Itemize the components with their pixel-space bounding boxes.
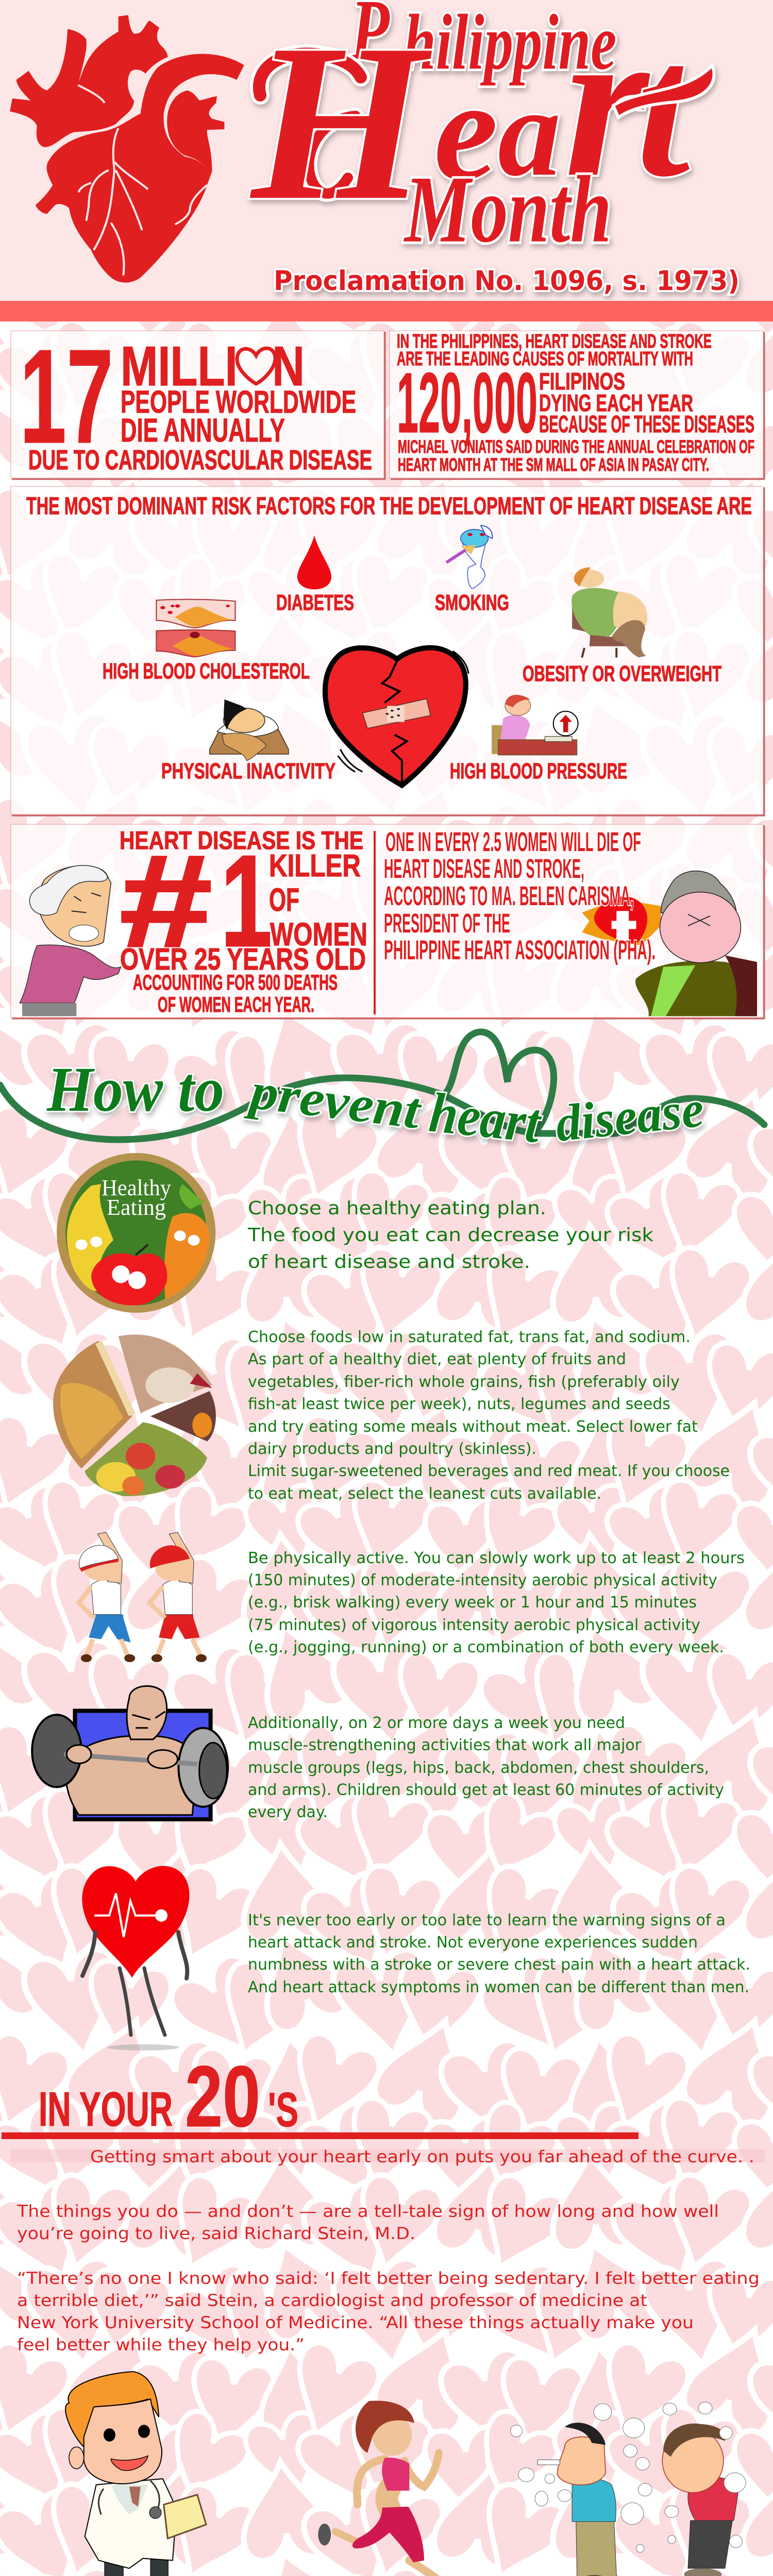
panel: risk factors bbox=[11, 486, 764, 816]
text block: choose foods: Limit sugar-sweetened beverages and red meat. If you choose bbox=[248, 1462, 730, 1480]
title flourishes behind Heart bbox=[259, 54, 361, 194]
text block: muscle strengthening: every day. bbox=[248, 1803, 328, 1821]
icon: heart character with pulse bbox=[82, 1866, 190, 2050]
stat: 17: 17 bbox=[20, 322, 113, 471]
heading part: disease: disease bbox=[553, 1080, 707, 1153]
icon: anatomical heart bbox=[10, 15, 244, 283]
text block: muscle strengthening: Additionally, on 2 or more days a week you need bbox=[248, 1714, 625, 1732]
title word: Heart: H bbox=[248, 0, 434, 247]
text block: warning signs: numbness with a stroke or severe chest pain with a heart attack. bbox=[248, 1956, 750, 1974]
icon: obese person in chair bbox=[572, 567, 647, 657]
label: high blood cholesterol: HIGH BLOOD CHOLESTEROL bbox=[103, 659, 310, 684]
text block: the things you do: you’re going to live, said Richard Stein, M.D. bbox=[17, 2224, 415, 2243]
text: dying each year: DYING EACH YEAR bbox=[539, 389, 693, 416]
stat: number one: 1 bbox=[221, 828, 272, 974]
text: due to cardiovascular disease: DUE TO CARDIOVASCULAR DISEASE bbox=[28, 445, 372, 476]
title word: Heart: t bbox=[636, 3, 697, 216]
text block: warning signs bbox=[248, 1911, 750, 1996]
divider bbox=[374, 831, 376, 1014]
stat word: million: MILLION bbox=[121, 335, 305, 398]
text block: warning signs: It's never too early or too late to learn the warning signs of a bbox=[248, 1911, 726, 1929]
text block: choose foods: dairy products and poultry (skinless). bbox=[248, 1440, 536, 1458]
label: smoking: SMOKING bbox=[435, 590, 509, 615]
panel: women and heart disease: PRESIDENT OF THE bbox=[384, 908, 510, 939]
text: over 25 years old: OVER 25 YEARS OLD bbox=[120, 942, 366, 976]
text block: choose foods: vegetables, fiber-rich whole grains, fish (preferably oily bbox=[248, 1373, 680, 1391]
text block: muscle strengthening: muscle groups (legs, hips, back, abdomen, chest shoulders, bbox=[248, 1759, 709, 1777]
text block: be physically active: (e.g., jogging, running) or a combination of both every week. bbox=[248, 1638, 724, 1656]
heading part: how to: How to bbox=[46, 1054, 224, 1125]
title word: Philippine: hilippine bbox=[404, 0, 616, 86]
proclamation line: Proclamation No. 1096, s. 1973) bbox=[274, 265, 740, 297]
text: people worldwide: PEOPLE WORLDWIDE bbox=[121, 384, 356, 419]
text: filipinos: FILIPINOS bbox=[539, 368, 625, 395]
text block: the things you do: The things you do — and don’t — are a tell-tale sign of how long and how well bbox=[16, 2201, 719, 2221]
text block: warning signs: heart attack and stroke. Not everyone experiences sudden bbox=[248, 1934, 698, 1952]
heading decoration: green swoosh with heart loop bbox=[0, 1032, 764, 1140]
text block: Stein quote: New York University School of Medicine. “All these things actually make you bbox=[17, 2313, 694, 2332]
text block: Stein quote: “There’s no one I know who said: ‘I felt better being sedentary. I felt better eating bbox=[17, 2268, 760, 2288]
text: die annually: DIE ANNUALLY bbox=[121, 412, 285, 449]
icon: blood drop bbox=[297, 535, 331, 589]
icon: exercising children bbox=[79, 1532, 207, 1662]
icon: broken heart with bandage bbox=[325, 648, 468, 785]
text block: muscle strengthening bbox=[248, 1714, 724, 1821]
heading: how to prevent heart disease bbox=[46, 1054, 707, 1155]
text block: be physically active: Be physically active. You can slowly work up to at least 2 hours bbox=[248, 1549, 745, 1567]
text block: healthy eating plan: Choose a healthy eating plan. bbox=[248, 1198, 546, 1219]
text block: the things you do bbox=[16, 2201, 719, 2243]
heading part: prevent: prevent bbox=[243, 1062, 425, 1140]
text block: muscle strengthening: muscle-strengthening activities that work all major bbox=[248, 1736, 642, 1754]
text block: be physically active bbox=[248, 1549, 745, 1656]
icon: heart letter O bbox=[237, 348, 275, 384]
stat: hash sign: # bbox=[120, 828, 212, 974]
panel: 120,000 Filipinos: 120,000 bbox=[397, 355, 537, 451]
text: getting smart: Getting smart about your heart early on puts you far ahead of the curve. . bbox=[90, 2147, 754, 2166]
icon: smoking figure bbox=[446, 526, 492, 588]
panel: women and heart disease bbox=[11, 824, 764, 1019]
illustration: elderly woman left bbox=[20, 866, 121, 1016]
heading part: heart: heart bbox=[426, 1081, 545, 1155]
icon: sleeping person at desk bbox=[210, 700, 289, 760]
icon: blood pressure check bbox=[492, 695, 578, 755]
text block: choose foods: As part of a healthy diet, eat plenty of fruits and bbox=[248, 1350, 626, 1368]
title word: Month: Month bbox=[403, 157, 612, 263]
heading: in your 20's bbox=[39, 2048, 298, 2145]
panel: 120,000 Filipinos bbox=[390, 331, 764, 479]
illustration: smoker and bystander bbox=[510, 2402, 746, 2576]
text block: healthy eating plan: of heart disease and stroke. bbox=[248, 1251, 530, 1273]
heading: in your 20's: 'S bbox=[268, 2082, 298, 2137]
text block: choose foods bbox=[248, 1328, 730, 1503]
icon: weightlifter bbox=[32, 1686, 228, 1819]
text block: be physically active: (75 minutes) of vigorous intensity aerobic physical activity bbox=[248, 1616, 700, 1634]
text block: choose foods: fish-at least twice per week), nuts, legumes and seeds bbox=[248, 1395, 670, 1413]
text block: choose foods: Choose foods low in saturated fat, trans fat, and sodium. bbox=[248, 1328, 691, 1346]
text block: Stein quote: feel better while they help you.” bbox=[17, 2335, 305, 2354]
text: of: OF bbox=[269, 882, 299, 918]
icon: healthy eating badge bbox=[57, 1153, 215, 1313]
text: women: WOMEN bbox=[270, 917, 367, 953]
heading: in your 20's: IN YOUR bbox=[39, 2082, 173, 2136]
title word: Heart: a bbox=[498, 62, 561, 202]
text block: choose foods: and try eating some meals without meat. Select lower fat bbox=[248, 1418, 698, 1436]
title word: Heart: e bbox=[434, 50, 498, 210]
text block: be physically active: (150 minutes) of moderate-intensity aerobic physical activity bbox=[248, 1571, 717, 1589]
badge text: Healthy bbox=[102, 1175, 171, 1200]
heading underline bbox=[2, 2132, 638, 2139]
text block: healthy eating plan bbox=[247, 1198, 653, 1273]
text block: warning signs: And heart attack symptoms in women can be different than men. bbox=[248, 1978, 749, 1996]
title: Philippine Heart Month bbox=[248, 0, 714, 263]
text: accounting for 500 deaths: ACCOUNTING FOR 500 DEATHS bbox=[133, 970, 338, 994]
icon: clogged arteries bbox=[156, 599, 235, 657]
icon: food groups plate bbox=[53, 1334, 216, 1496]
label: diabetes: DIABETES bbox=[276, 590, 354, 615]
illustration: jogger bbox=[318, 2401, 456, 2576]
panel: 17 million bbox=[11, 322, 385, 479]
text: killer: KILLER bbox=[269, 848, 361, 883]
text block: Stein quote bbox=[17, 2268, 760, 2354]
title flourish: t crossbar bbox=[613, 65, 714, 117]
badge text second line: Eating bbox=[107, 1195, 166, 1220]
label: physical inactivity: PHYSICAL INACTIVITY bbox=[161, 759, 335, 784]
illustration: elderly woman right with heart bbox=[582, 871, 757, 1016]
text block: Stein quote: a terrible diet,’” said Stein, a cardiologist and professor of medicine at bbox=[17, 2291, 647, 2310]
header background bbox=[0, 0, 773, 301]
faint band bbox=[10, 2149, 765, 2162]
label: high blood pressure: HIGH BLOOD PRESSURE bbox=[450, 759, 627, 784]
heading: in your 20's: 20 bbox=[185, 2048, 260, 2145]
text: heart disease is the: HEART DISEASE IS THE bbox=[120, 827, 363, 855]
text block: choose foods: to eat meat, select the leanest cuts available. bbox=[248, 1485, 601, 1503]
text: of women each year: OF WOMEN EACH YEAR. bbox=[158, 992, 314, 1016]
header red band bbox=[0, 301, 773, 321]
text block: healthy eating plan: The food you eat can decrease your risk bbox=[247, 1225, 653, 1246]
illustration: doctor bbox=[65, 2371, 206, 2576]
text block: be physically active: (e.g., brisk walking) every week or 1 hour and 15 minutes bbox=[248, 1594, 697, 1612]
text block: muscle strengthening: and arms). Children should get at least 60 minutes of activity bbox=[248, 1781, 724, 1799]
